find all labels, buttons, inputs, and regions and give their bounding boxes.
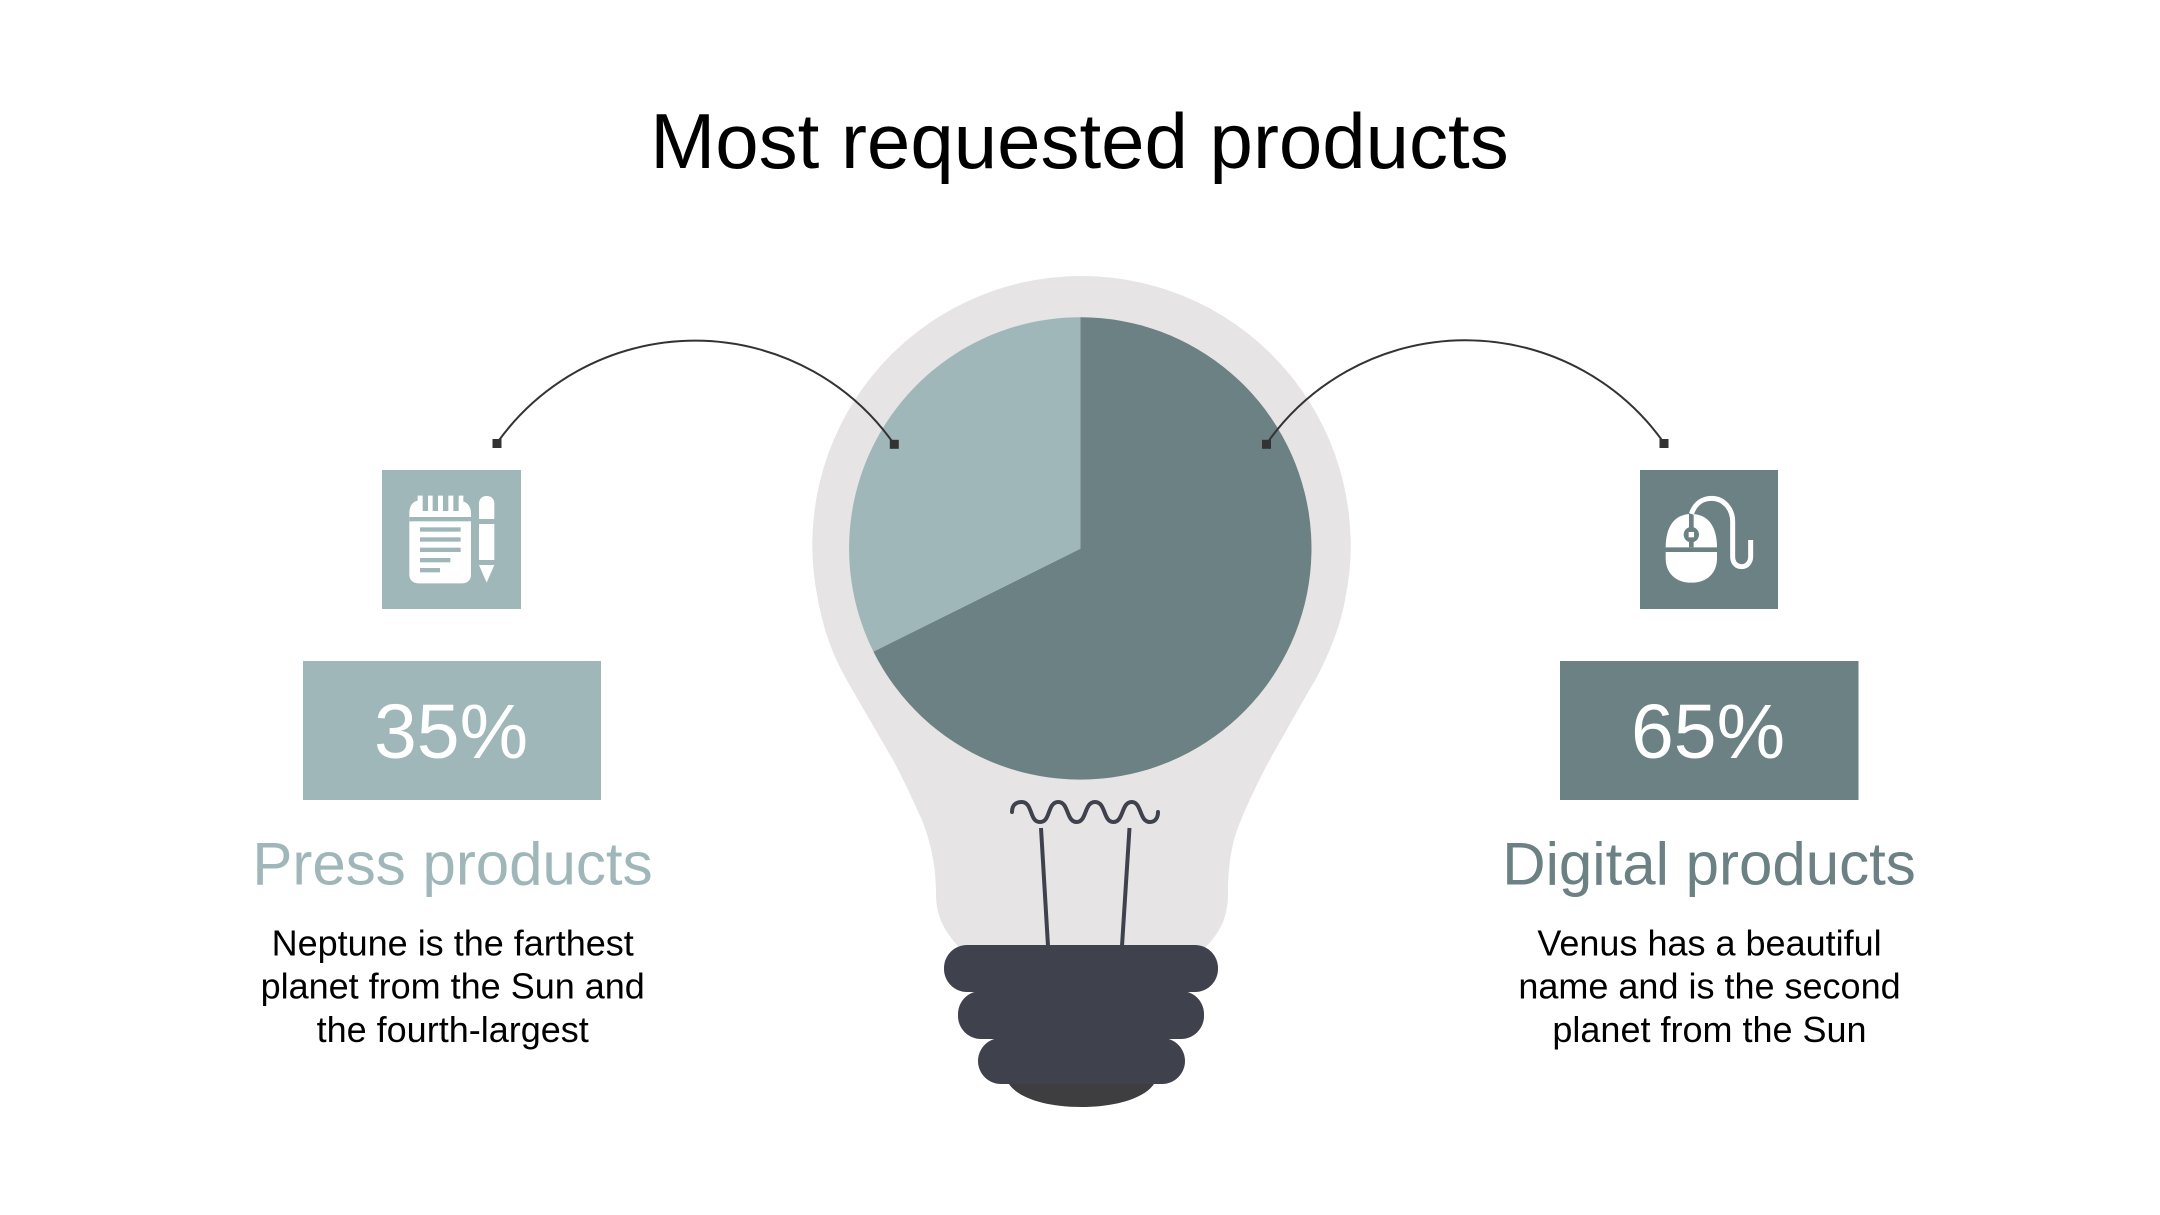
pie slice: 35% press bbox=[849, 317, 1080, 652]
filament bbox=[1012, 802, 1158, 822]
heading: press products: Press products bbox=[252, 830, 653, 898]
pie slice: 65% digital bbox=[873, 317, 1311, 780]
description: digital products: name and is the second bbox=[1518, 966, 1901, 1007]
light bulb with pie chart bbox=[812, 276, 1351, 1107]
icon: computer mouse bbox=[1640, 470, 1778, 609]
description: press products: planet from the Sun and bbox=[261, 966, 645, 1007]
bulb screw base bbox=[944, 945, 1218, 1084]
percentage box: 35% bbox=[303, 661, 601, 800]
percentage box: 35%: 35% bbox=[374, 689, 528, 775]
title: Most requested products bbox=[650, 97, 1509, 185]
filament wires bbox=[1041, 828, 1130, 946]
description: press products: the fourth-largest bbox=[317, 1009, 589, 1050]
bulb glass bbox=[812, 276, 1351, 948]
heading: digital products: Digital products bbox=[1502, 830, 1916, 898]
description: press products: Neptune is the farthest bbox=[272, 922, 634, 963]
panel: press products bbox=[252, 470, 653, 1050]
bulb base cap bbox=[1007, 1080, 1156, 1107]
percentage box: 65% bbox=[1560, 661, 1858, 800]
description: digital products bbox=[1518, 922, 1901, 1050]
icon: notepad and pencil bbox=[382, 470, 521, 609]
panel: digital products bbox=[1502, 470, 1916, 1050]
percentage box: 65%: 65% bbox=[1631, 689, 1785, 775]
description: digital products: Venus has a beautiful bbox=[1537, 922, 1882, 963]
description: press products bbox=[261, 922, 645, 1050]
description: digital products: planet from the Sun bbox=[1552, 1009, 1867, 1050]
connector arc: right bbox=[1262, 340, 1668, 449]
connector arc: left bbox=[492, 341, 899, 449]
